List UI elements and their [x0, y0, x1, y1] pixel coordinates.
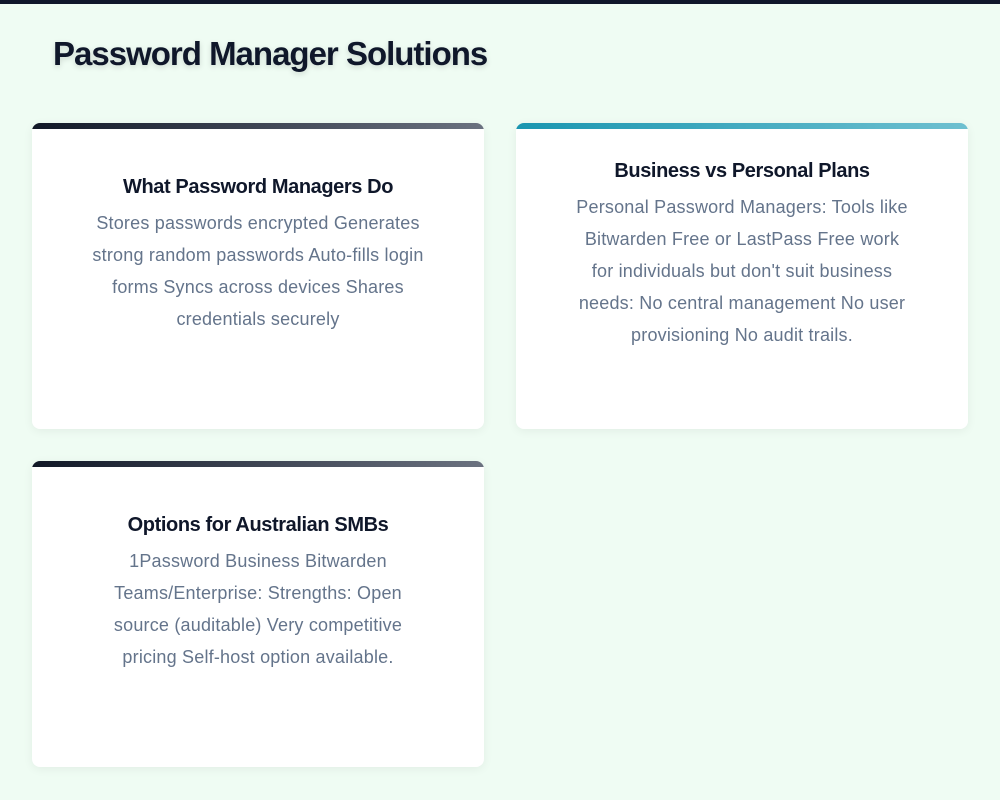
body text: pricing Self-host option available. [122, 647, 394, 667]
panel: options for australian SMBs [32, 461, 484, 767]
panel: what password managers do [32, 123, 484, 429]
body text: Personal Password Managers: Tools like [576, 197, 908, 217]
heading: Business vs Personal Plans [614, 160, 870, 182]
body text: strong random passwords Auto-fills login [92, 245, 424, 265]
body text: provisioning No audit trails. [631, 325, 853, 345]
body text: Teams/Enterprise: Strengths: Open [114, 583, 402, 603]
body text: Stores passwords encrypted Generates [96, 213, 420, 233]
body text: source (auditable) Very competitive [114, 615, 402, 635]
body text: 1Password Business Bitwarden [129, 551, 387, 571]
title: Password Manager Solutions [53, 35, 487, 72]
body text: needs: No central management No user [579, 293, 905, 313]
body text [576, 197, 908, 345]
body text [114, 551, 402, 667]
body text [92, 213, 424, 329]
body text: credentials securely [176, 309, 340, 329]
heading: Options for Australian SMBs [128, 514, 388, 536]
body text: forms Syncs across devices Shares [112, 277, 404, 297]
body text: for individuals but don't suit business [592, 261, 892, 281]
heading: What Password Managers Do [123, 176, 393, 198]
body text: Bitwarden Free or LastPass Free work [585, 229, 899, 249]
panel: business vs personal [516, 123, 968, 429]
